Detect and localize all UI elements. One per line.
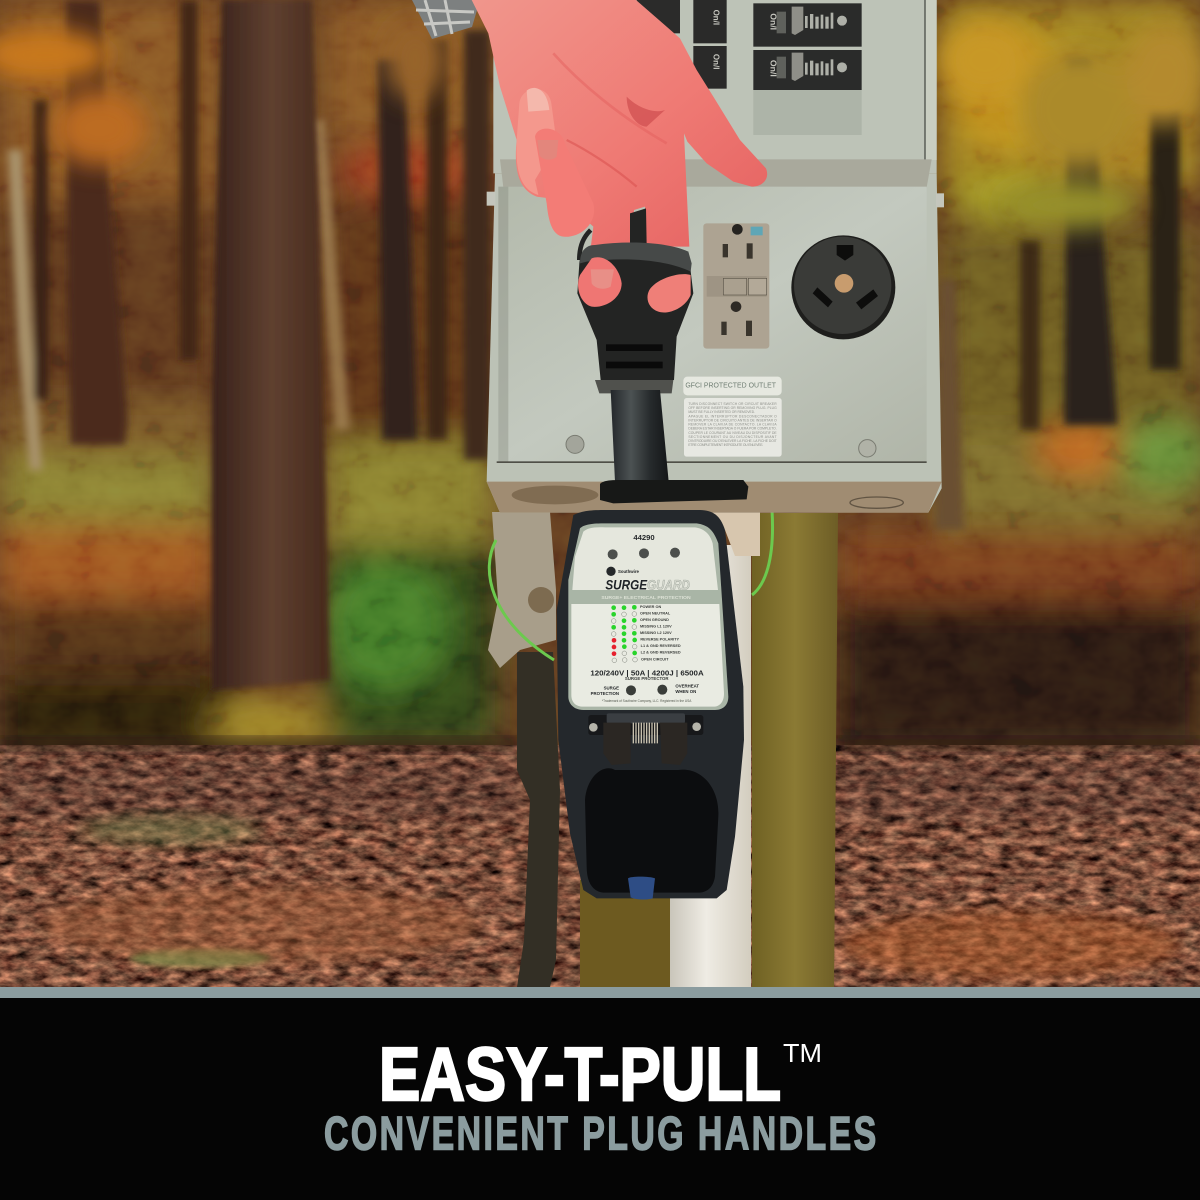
circuit breakers: On/I	[769, 13, 779, 30]
model number: 44290	[633, 533, 655, 542]
hinge	[588, 713, 703, 765]
blurred foliage masses	[0, 0, 1200, 755]
white PVC pipe	[670, 545, 751, 987]
warning sticker: COUPER LE COURANT AU NIVEAU DU DISPOSITIF DE	[688, 431, 777, 435]
warning sticker: INTERRUPTOR DE CIRCUITO ANTES DE INSERTAR O	[688, 418, 777, 422]
Southwire logo	[606, 567, 640, 576]
surge protection lamp: PROTECTION	[591, 691, 619, 696]
label: GFCI protected outlet	[683, 377, 782, 395]
indicator lenses	[608, 548, 680, 559]
side latch tabs	[487, 192, 495, 206]
footer gray stripe	[0, 987, 1200, 998]
support post and conduit	[488, 498, 838, 987]
LED status chart	[611, 605, 681, 663]
lower enclosure body	[487, 173, 942, 513]
foliage overlapping trunks	[0, 20, 1200, 229]
circuit breakers: On/I	[711, 10, 720, 25]
wooden post	[752, 513, 838, 987]
pipe coupling	[700, 498, 760, 556]
LED status chart: L1 & GND REVERSED	[641, 644, 681, 648]
lower wood post segment	[580, 880, 672, 987]
LED status chart: OPEN GROUND	[640, 618, 669, 622]
warning sticker: D'INTRODUIRE OU D'ENLEVER LA FICHE. LA FICHE DOIT	[688, 439, 777, 443]
warning sticker: TURN DISCONNECT SWITCH OR CIRCUIT BREAKER	[688, 402, 777, 406]
conduit bracket	[488, 512, 556, 668]
warning sticker	[684, 398, 782, 457]
round outlet cover	[585, 768, 718, 893]
LED status chart: OPEN CIRCUIT	[641, 657, 669, 661]
overheat lamp	[657, 684, 699, 695]
LED status chart: MISSING L1 120V	[640, 625, 672, 629]
heading: EASY-T-PULL	[379, 1032, 781, 1116]
LED status chart: MISSING L2 120V	[640, 631, 672, 635]
metal conduit	[517, 652, 560, 987]
warning sticker: MUST BE FULLY INSERTED OR REMOVED.	[688, 410, 755, 414]
forest floor leaf litter	[0, 738, 1200, 990]
screws	[566, 435, 584, 453]
green ground wire	[489, 510, 773, 660]
warning sticker: SECTIONNEMENT OU DU DISJONCTEUR AVANT	[688, 435, 777, 439]
subheading: CONVENIENT PLUG HANDLES	[324, 1107, 876, 1160]
label plate	[568, 523, 728, 710]
bottom lip edge	[497, 461, 927, 463]
device body	[557, 510, 744, 898]
front finger with nail	[535, 129, 594, 237]
RV receptacle	[791, 235, 895, 339]
Surge Guard device	[557, 510, 744, 899]
upper panel	[493, 0, 937, 173]
warning sticker: APAGUE EL INTERRUPTOR DESCONECTADOR O	[688, 414, 777, 418]
warning sticker: OFF BEFORE INSERTING OR REMOVING PLUG. PLUG	[688, 406, 777, 410]
cable collar	[600, 480, 748, 503]
SurgeGuard logo: SURGEGUARD	[605, 577, 690, 592]
LED status chart: POWER ON	[640, 605, 662, 609]
plug handle	[577, 208, 693, 393]
Southwire logo: Southwire	[618, 569, 640, 574]
overheat lamp: WHEN ON	[675, 689, 696, 694]
opened flap	[500, 159, 932, 187]
warning sticker: REMOVER LA CLAVIJA DE CONTACTO. LA CLAVIJA	[688, 422, 777, 426]
fingertips gripping handle	[578, 257, 691, 313]
label upper window	[572, 527, 718, 590]
circuit breakers	[637, 0, 862, 90]
surge protection lamp	[591, 685, 636, 696]
hand, back layer	[472, 0, 767, 253]
folded finger with nail	[516, 88, 557, 195]
footer black band	[0, 998, 1200, 1200]
overheat lamp: OVERHEAT	[675, 684, 699, 689]
circuit breakers: On/I	[711, 54, 720, 69]
warning sticker: DEBERA ESTAR INSERTADA O FUERA POR COMPLETO.	[688, 426, 777, 430]
surge protection lamp: SURGE	[604, 685, 619, 690]
trademark note: *Trademark of Southwire Company, LLC. Registered in the USA	[602, 699, 692, 703]
plate left side shadow	[498, 187, 508, 462]
bronze underside of box	[487, 482, 942, 513]
ratings line: 120/240V | 50A | 4200J | 6500A	[590, 670, 704, 677]
bracket bolt	[528, 587, 554, 613]
blue latch	[628, 877, 655, 899]
circuit breakers: On/I	[769, 60, 779, 77]
large foreground tree trunk	[212, 0, 330, 690]
electrical pedestal box	[472, 0, 944, 513]
flannel shirt cuff	[412, 0, 480, 39]
warning sticker: ETRE COMPLETEMENT INTRODUITE OU ENLEVEE.	[688, 443, 763, 447]
power cable	[611, 390, 669, 482]
GFCI outlet	[703, 223, 769, 349]
footer panel	[0, 987, 1200, 1200]
foliage speckle texture	[0, 0, 1200, 745]
label lower window	[571, 604, 724, 707]
trademark: TM	[783, 1038, 822, 1068]
LED status chart: OPEN NEUTRAL	[640, 612, 671, 616]
inner plate	[498, 187, 927, 462]
surge protector caption: SURGE PROTECTOR	[625, 676, 669, 681]
LED status chart: REVERSE POLARITY	[640, 637, 679, 641]
background tree trunks	[8, 0, 1180, 530]
protection band text: SURGE+ ELECTRICAL PROTECTION	[601, 595, 691, 601]
label: GFCI protected outlet: GFCI PROTECTED OUTLET	[685, 382, 777, 389]
LED status chart: L2 & GND REVERSED	[641, 650, 681, 654]
knockouts	[512, 486, 598, 504]
